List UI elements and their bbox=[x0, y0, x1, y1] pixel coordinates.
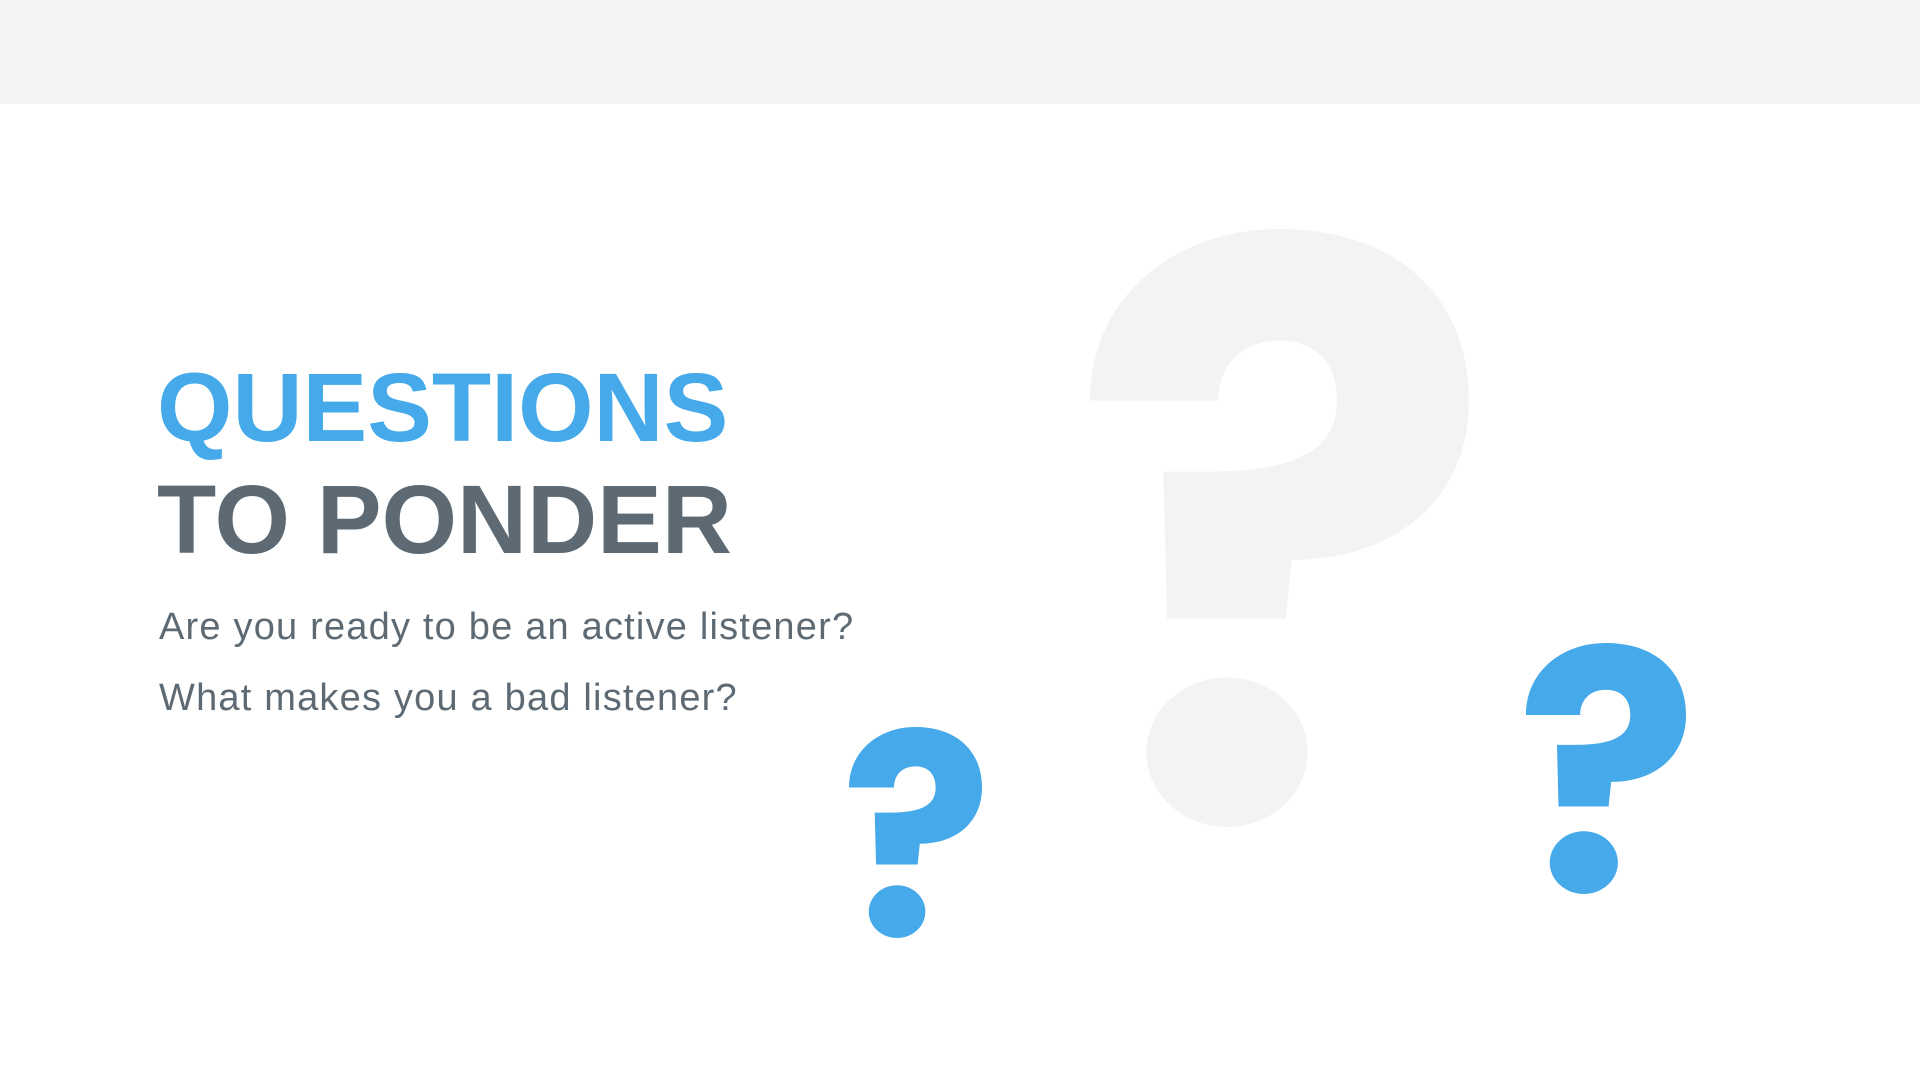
big grey question mark bbox=[1090, 229, 1469, 827]
title bbox=[157, 353, 732, 574]
title line 1: QUESTIONS bbox=[157, 353, 728, 462]
question 2: What makes you a bad listener? bbox=[159, 677, 738, 719]
title line 2: TO PONDER bbox=[157, 465, 732, 574]
subtitle questions bbox=[159, 606, 854, 719]
small blue question mark bbox=[849, 727, 982, 938]
question 1: Are you ready to be an active listener? bbox=[159, 606, 854, 648]
right blue question mark bbox=[1526, 643, 1686, 894]
top band bbox=[0, 0, 1920, 104]
